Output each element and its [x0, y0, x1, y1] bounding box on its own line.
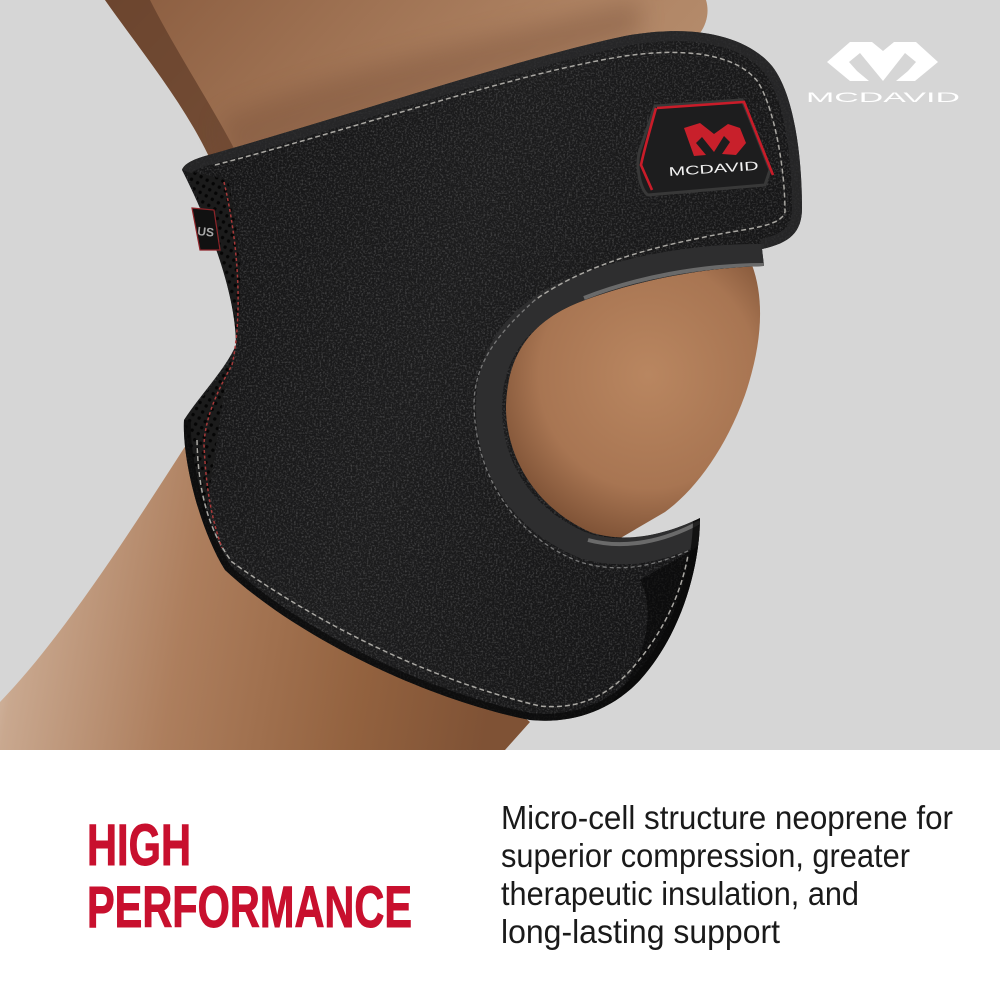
side patch label: [192, 208, 220, 250]
McDavid logo: [806, 42, 960, 105]
patch wordmark: MCDAVID: [668, 159, 759, 179]
shaded lower panel: [611, 547, 698, 704]
photo: leg and knee: [0, 0, 760, 750]
red stitching: [204, 182, 238, 548]
side patch label: US: [197, 224, 215, 240]
logo mark: [827, 42, 938, 81]
description text: [501, 799, 953, 950]
inner stitching along cut-out: [474, 300, 690, 568]
neoprene texture: [170, 20, 820, 740]
photo background: [0, 0, 1000, 750]
description text: long-lasting support: [501, 913, 780, 950]
patch red outline: [641, 102, 773, 190]
side mesh panel: [184, 170, 240, 520]
hole grey rim: [584, 265, 764, 544]
outer binding: [182, 31, 802, 249]
logo wordmark: MCDAVID: [806, 89, 960, 105]
upper thigh skin: [105, 0, 708, 200]
grey stitching bottom: [197, 440, 688, 707]
heading: PERFORMANCE: [87, 875, 412, 940]
heading: [87, 813, 412, 940]
knee brace: [170, 20, 820, 740]
hole border binding: [489, 257, 764, 551]
grey stitching top: [215, 52, 785, 300]
brace patch: [638, 100, 773, 195]
patch red logo: [684, 123, 746, 156]
thigh shadow: [105, 0, 240, 170]
description text: therapeutic insulation, and: [501, 875, 859, 912]
kneecap skin: [480, 258, 760, 550]
lower leg skin: [0, 445, 530, 750]
description text: Micro-cell structure neoprene for: [501, 799, 953, 836]
heading: HIGH: [87, 813, 191, 878]
brace body: [182, 31, 802, 721]
white caption panel: [0, 750, 1000, 1000]
description text: superior compression, greater: [501, 837, 910, 874]
thigh shadow above brace: [220, 0, 640, 170]
